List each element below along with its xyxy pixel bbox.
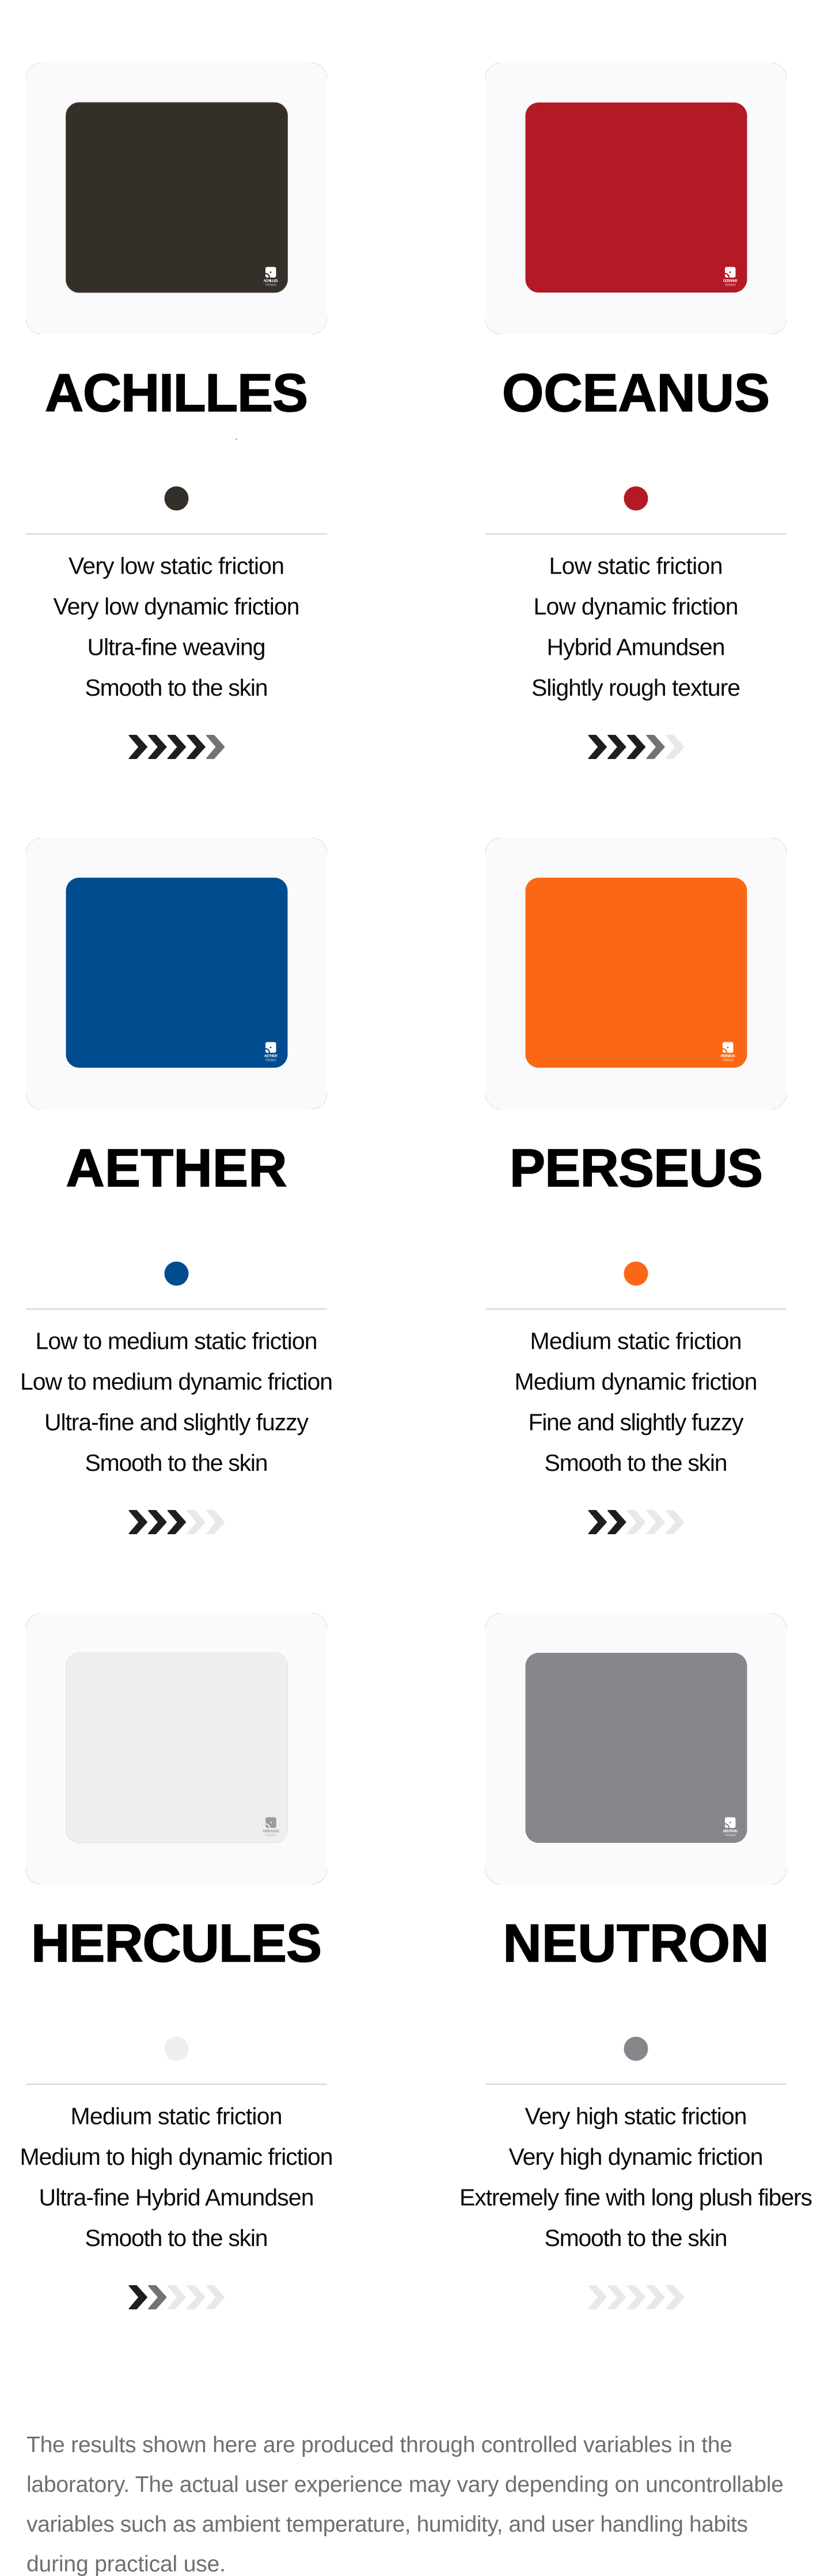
feature list: Extremely fine with long plush fibers bbox=[459, 2184, 812, 2210]
feature list: Smooth to the skin bbox=[85, 1450, 268, 1476]
colour dot bbox=[165, 2036, 189, 2061]
feature list: Slightly rough texture bbox=[531, 674, 740, 701]
title: NEUTRON bbox=[503, 1913, 769, 1973]
feature list: Smooth to the skin bbox=[545, 1450, 728, 1476]
logo: PREMIUM bbox=[265, 283, 276, 287]
feature list: Low static friction bbox=[549, 553, 723, 579]
product image card bbox=[485, 1613, 787, 1884]
logo: ACHILLES bbox=[264, 280, 278, 283]
feature list: Low to medium dynamic friction bbox=[20, 1368, 333, 1395]
title: ACHILLES bbox=[45, 363, 308, 423]
feature list: Low dynamic friction bbox=[533, 593, 738, 620]
colour dot bbox=[624, 486, 648, 510]
logo: HERCULES bbox=[263, 1830, 279, 1834]
colour dot bbox=[165, 486, 189, 510]
logo bbox=[723, 1818, 738, 1837]
panel: Hercules bbox=[20, 1613, 333, 2309]
feature list: Low to medium static friction bbox=[36, 1328, 318, 1355]
footer disclaimer bbox=[26, 2433, 784, 2576]
logo: PREMIUM bbox=[725, 1834, 736, 1837]
logo bbox=[263, 1818, 279, 1838]
colour dot bbox=[624, 1261, 648, 1285]
title: OCEANUS bbox=[502, 363, 770, 423]
feature list: Very low dynamic friction bbox=[53, 593, 299, 620]
colour dot bbox=[165, 1261, 189, 1285]
feature list: Ultra-fine weaving bbox=[88, 633, 266, 660]
rating chevrons bbox=[129, 2286, 224, 2309]
feature list: Fine and slightly fuzzy bbox=[529, 1409, 744, 1435]
logo bbox=[264, 267, 278, 287]
footer disclaimer: variables such as ambient temperature, humidity, and user handling habits bbox=[26, 2512, 748, 2537]
feature list bbox=[459, 2103, 812, 2251]
feature list bbox=[20, 1328, 333, 1476]
mouse pad bbox=[525, 103, 747, 293]
product image card bbox=[26, 1613, 327, 1884]
logo bbox=[721, 1042, 735, 1062]
logo: PERSEUS bbox=[721, 1055, 735, 1059]
feature list: Smooth to the skin bbox=[545, 2225, 728, 2251]
feature list: Ultra-fine Hybrid Amundsen bbox=[39, 2184, 314, 2210]
logo: PREMIUM bbox=[265, 1059, 276, 1062]
title: PERSEUS bbox=[510, 1138, 763, 1198]
logo: PREMIUM bbox=[723, 1059, 734, 1062]
mouse pad bbox=[66, 103, 288, 293]
feature list: Medium to high dynamic friction bbox=[20, 2143, 333, 2170]
footer disclaimer: during practical use. bbox=[26, 2552, 226, 2576]
mouse pad bbox=[525, 1653, 747, 1843]
product image card bbox=[26, 63, 327, 334]
rating chevrons bbox=[129, 735, 224, 758]
feature list: Medium dynamic friction bbox=[515, 1368, 758, 1395]
feature list: Smooth to the skin bbox=[85, 674, 268, 701]
mouse pad bbox=[525, 878, 747, 1068]
feature list bbox=[531, 553, 740, 701]
logo: NEUTRON bbox=[723, 1830, 738, 1834]
rating chevrons bbox=[588, 1511, 683, 1534]
logo: OCEANUS bbox=[723, 280, 738, 283]
panel: Achilles bbox=[26, 63, 327, 758]
feature list: Very high dynamic friction bbox=[509, 2143, 763, 2170]
feature list bbox=[20, 2103, 333, 2251]
title: AETHER bbox=[66, 1138, 287, 1198]
product image card bbox=[26, 838, 327, 1109]
feature list bbox=[515, 1328, 758, 1476]
rating chevrons bbox=[129, 1511, 224, 1534]
logo: PREMIUM bbox=[725, 283, 736, 287]
panel: Perseus bbox=[485, 838, 787, 1534]
mouse pad bbox=[66, 1653, 288, 1843]
product image card bbox=[485, 63, 787, 334]
footer disclaimer: The results shown here are produced through controlled variables in the bbox=[26, 2433, 732, 2457]
feature list: Ultra-fine and slightly fuzzy bbox=[44, 1409, 309, 1435]
footer disclaimer: laboratory. The actual user experience may vary depending on uncontrollable bbox=[26, 2472, 784, 2497]
mouse pad bbox=[66, 878, 288, 1068]
panel: Oceanus bbox=[485, 63, 787, 758]
logo bbox=[264, 1042, 278, 1062]
logo bbox=[723, 267, 738, 287]
feature list: Very low static friction bbox=[69, 553, 284, 579]
panel: Aether bbox=[20, 838, 333, 1534]
title: HERCULES bbox=[31, 1913, 322, 1973]
feature list bbox=[53, 553, 299, 701]
colour dot bbox=[624, 2036, 648, 2061]
rating chevrons bbox=[588, 735, 683, 758]
feature list: Smooth to the skin bbox=[85, 2225, 268, 2251]
logo: PREMIUM bbox=[265, 1834, 276, 1838]
rating chevrons bbox=[588, 2286, 683, 2309]
feature list: Hybrid Amundsen bbox=[547, 633, 725, 660]
logo: AETHER bbox=[264, 1055, 278, 1059]
feature list: Very high static friction bbox=[525, 2103, 747, 2130]
feature list: Medium static friction bbox=[530, 1328, 742, 1355]
product image card bbox=[485, 838, 787, 1109]
panel: Neutron bbox=[459, 1613, 812, 2309]
feature list: Medium static friction bbox=[70, 2103, 282, 2130]
